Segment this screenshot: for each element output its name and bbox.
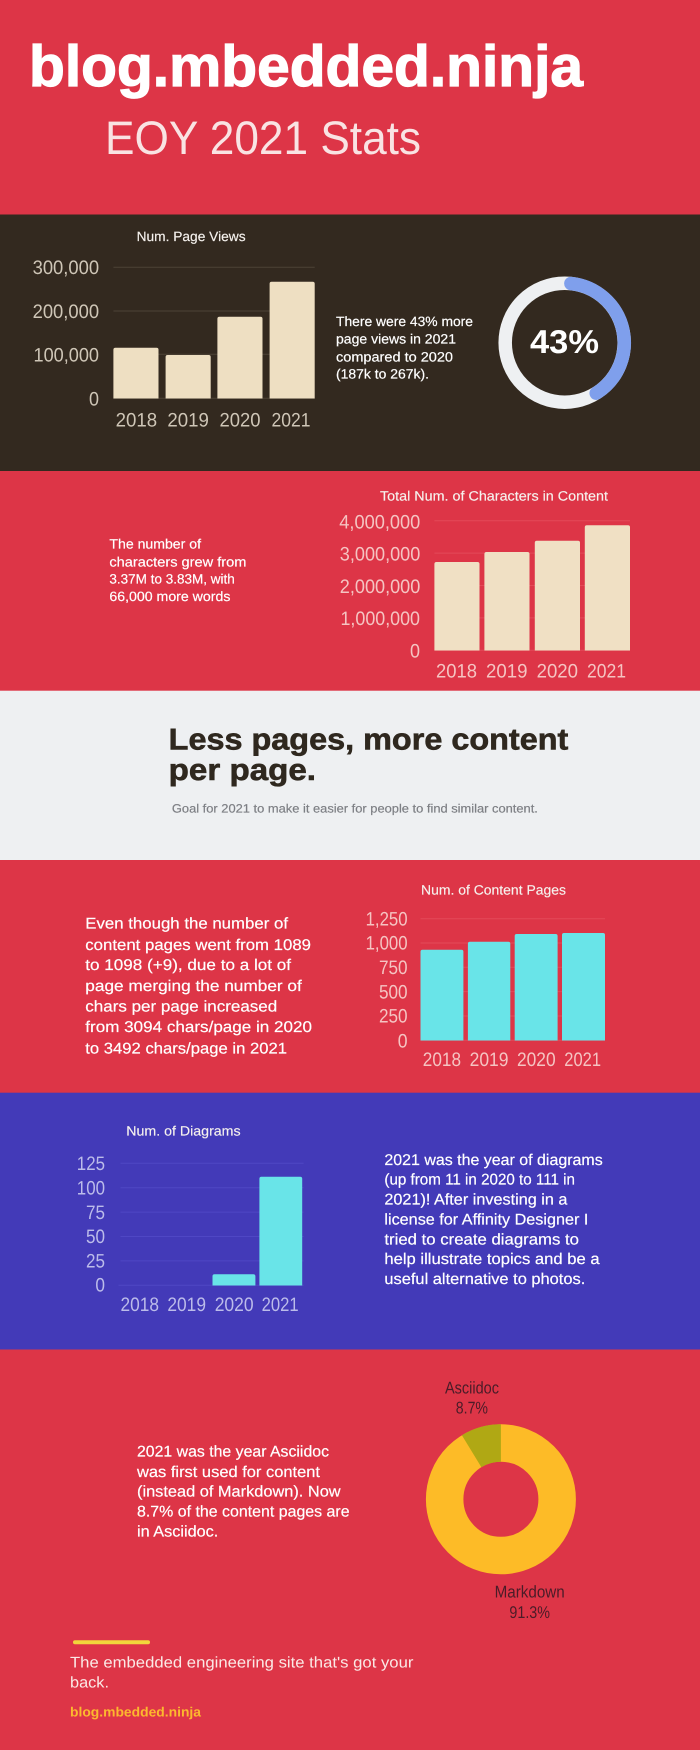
bar chart: page views: 2021 xyxy=(272,410,310,432)
panel: less pages xyxy=(0,691,700,860)
donut chart: markup formats: 91.3% xyxy=(509,1603,550,1622)
bar chart: page views: 2020 xyxy=(220,410,261,432)
panel: header xyxy=(0,0,700,214)
chart title: content pages: Num. of Content Pages xyxy=(421,882,566,897)
donut chart: markup formats: Asciidoc xyxy=(445,1378,499,1397)
text: characters summary: The number of xyxy=(109,537,201,552)
bar chart: diagrams: 125 xyxy=(77,1153,105,1175)
bar chart: content pages: 250 xyxy=(379,1006,408,1028)
donut: 43 percent xyxy=(505,283,624,402)
text: asciidoc summary: was first used for content xyxy=(136,1464,321,1481)
bar chart: content pages: 0 xyxy=(398,1030,408,1052)
panel: content pages xyxy=(0,860,700,1093)
text: diagrams summary: 2021 was the year of diagrams xyxy=(384,1152,603,1169)
bar chart: page views: 300,000 xyxy=(33,257,99,279)
footer tagline: The embedded engineering site that's got your xyxy=(70,1654,413,1671)
footer tagline xyxy=(70,1654,413,1691)
chart title: diagrams: Num. of Diagrams xyxy=(126,1124,241,1139)
bar chart: diagrams: 2021 xyxy=(262,1294,299,1316)
footer link: blog.mbedded.ninja xyxy=(70,1704,202,1719)
text: page views summary: (187k to 267k). xyxy=(336,367,429,382)
bar chart: diagrams: 2019 xyxy=(167,1294,206,1316)
text: asciidoc summary: 2021 was the year Asciidoc xyxy=(137,1444,329,1461)
text: content pages summary: Even though the number of xyxy=(85,916,289,933)
text: characters summary: characters grew from xyxy=(109,554,246,569)
text: diagrams summary: help illustrate topics and be a xyxy=(384,1251,600,1268)
text: asciidoc summary: (instead of Markdown). Now xyxy=(137,1484,341,1501)
chart title: characters: Total Num. of Characters in Content xyxy=(380,489,608,504)
text: diagrams summary: useful alternative to photos. xyxy=(384,1271,585,1288)
text: page views summary: compared to 2020 xyxy=(336,349,453,364)
title: blog.mbedded.ninja xyxy=(29,34,584,99)
text: page views summary: page views in 2021 xyxy=(336,332,456,347)
bar chart: content pages: 750 xyxy=(379,957,408,979)
bar chart: diagrams xyxy=(77,1153,304,1316)
text: page views summary xyxy=(336,314,473,382)
bar chart: content pages: 500 xyxy=(379,981,408,1003)
bar chart: characters: 2019 xyxy=(486,661,528,683)
bar chart: diagrams: 0 xyxy=(95,1275,105,1297)
text: content pages summary: content pages went from 1089 xyxy=(85,937,311,954)
subtitle: EOY 2021 Stats xyxy=(105,111,421,164)
subheading: Goal for 2021 to make it easier for people to find similar content. xyxy=(172,801,538,815)
bar chart: diagrams: 2020 xyxy=(215,1294,254,1316)
footer accent line xyxy=(73,1640,150,1644)
text: content pages summary: to 1098 (+9), due to a lot of xyxy=(85,957,292,974)
text: content pages summary: page merging the number of xyxy=(85,978,303,995)
text: page views summary: There were 43% more xyxy=(336,314,473,329)
text: content pages summary: to 3492 chars/page in 2021 xyxy=(85,1040,287,1057)
panel: diagrams xyxy=(0,1093,700,1350)
bar chart: characters: 0 xyxy=(410,640,420,662)
bar chart: diagrams: 75 xyxy=(86,1202,105,1224)
donut chart: markup formats xyxy=(445,1378,565,1622)
text: content pages summary xyxy=(85,916,312,1057)
bar chart: content pages: 2018 xyxy=(423,1049,461,1071)
donut: 43 percent: 43% xyxy=(530,323,599,360)
text: asciidoc summary xyxy=(136,1444,350,1540)
text: diagrams summary: (up from 11 in 2020 to 111 in xyxy=(384,1171,575,1188)
bar chart: diagrams: 25 xyxy=(86,1251,105,1273)
bar chart: characters: 2018 xyxy=(436,661,477,683)
text: content pages summary: from 3094 chars/page in 2020 xyxy=(85,1019,312,1036)
bar chart: page views: 2018 xyxy=(116,410,157,432)
donut chart: markup formats: Markdown xyxy=(495,1582,565,1601)
panel: characters xyxy=(0,471,700,691)
text: characters summary: 3.37M to 3.83M, with xyxy=(109,572,235,587)
heading xyxy=(169,723,568,787)
bar chart: characters xyxy=(339,511,630,683)
heading: per page. xyxy=(169,754,316,787)
heading: Less pages, more content xyxy=(169,723,568,756)
bar chart: content pages: 2021 xyxy=(564,1049,601,1071)
text: asciidoc summary: in Asciidoc. xyxy=(137,1523,218,1540)
text: content pages summary: chars per page increased xyxy=(85,998,277,1015)
bar chart: characters: 4,000,000 xyxy=(339,511,420,533)
bar chart: content pages: 2019 xyxy=(470,1049,508,1071)
panel: page views xyxy=(0,214,700,471)
text: diagrams summary: license for Affinity Designer I xyxy=(384,1211,588,1228)
panel: asciidoc and footer xyxy=(0,1350,700,1750)
text: diagrams summary xyxy=(384,1152,603,1288)
bar chart: page views xyxy=(33,257,315,432)
text: diagrams summary: tried to create diagrams to xyxy=(384,1231,579,1248)
bar chart: content pages: 1,000 xyxy=(366,933,408,955)
bar chart: diagrams: 100 xyxy=(77,1177,105,1199)
text: characters summary: 66,000 more words xyxy=(109,589,231,604)
text: characters summary xyxy=(109,537,246,604)
bar chart: characters: 3,000,000 xyxy=(340,543,420,565)
bar chart: page views: 0 xyxy=(89,388,99,410)
bar chart: page views: 100,000 xyxy=(34,344,99,366)
bar chart: characters: 2020 xyxy=(537,661,578,683)
bar chart: characters: 2,000,000 xyxy=(340,576,420,598)
bar chart: characters: 1,000,000 xyxy=(340,608,420,630)
text: diagrams summary: 2021)! After investing in a xyxy=(384,1191,568,1208)
bar chart: content pages: 1,250 xyxy=(366,908,408,930)
donut chart: markup formats: 8.7% xyxy=(456,1398,488,1417)
bar chart: page views: 2019 xyxy=(167,410,209,432)
bar chart: page views: 200,000 xyxy=(33,301,99,323)
chart title: page views: Num. Page Views xyxy=(137,229,246,244)
bar chart: characters: 2021 xyxy=(587,661,626,683)
bar chart: diagrams: 50 xyxy=(86,1226,105,1248)
bar chart: diagrams: 2018 xyxy=(120,1294,159,1316)
footer tagline: back. xyxy=(70,1674,109,1691)
bar chart: content pages xyxy=(366,908,605,1071)
bar chart: content pages: 2020 xyxy=(517,1049,556,1071)
text: asciidoc summary: 8.7% of the content pages are xyxy=(137,1503,350,1520)
